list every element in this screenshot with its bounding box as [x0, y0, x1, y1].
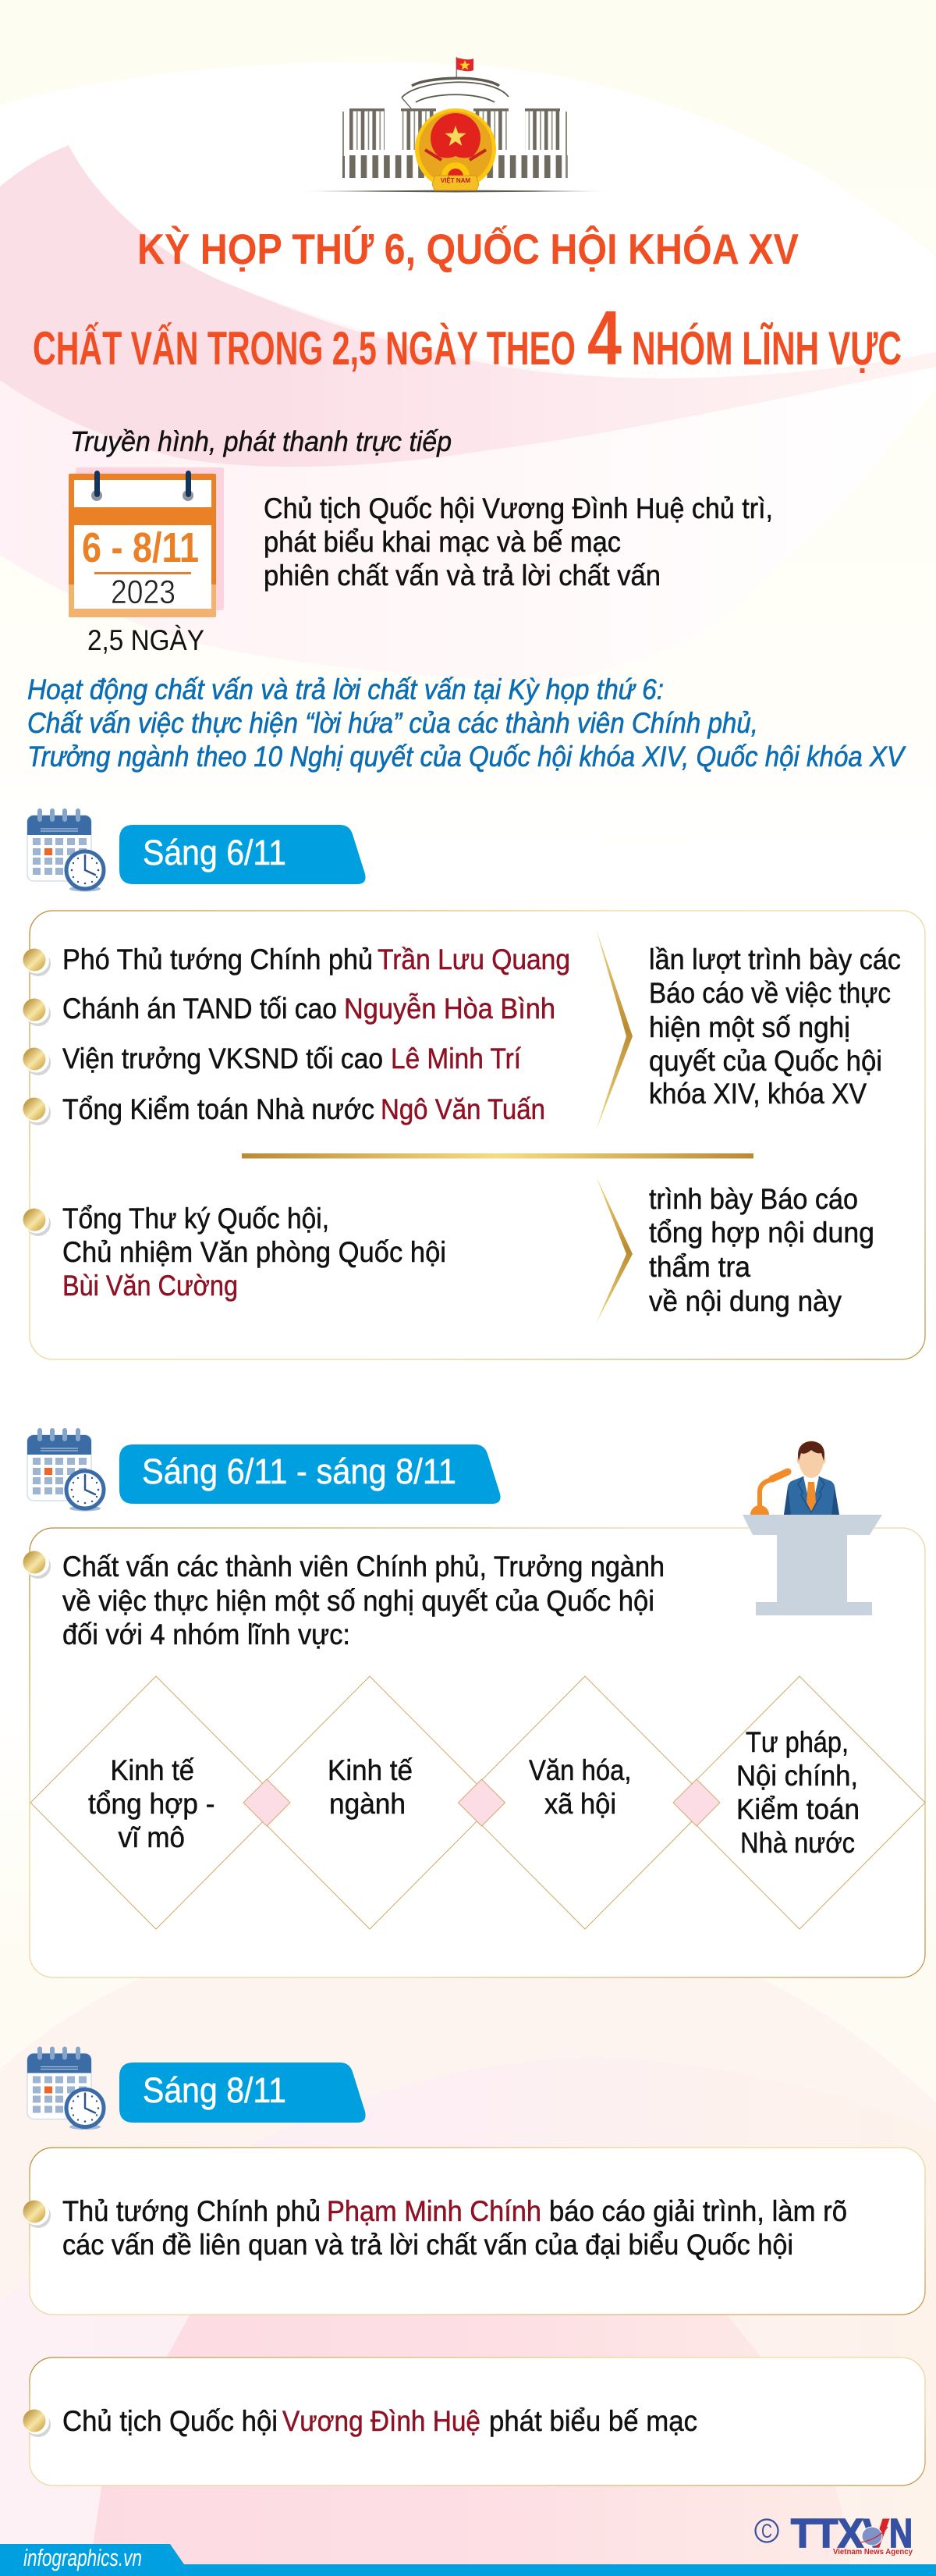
- presenter 1: [23, 943, 570, 976]
- date: 6 - 8/11: [82, 524, 199, 571]
- title: [33, 225, 902, 381]
- person: [784, 1441, 839, 1515]
- dome: [402, 78, 509, 108]
- ground line: [301, 190, 610, 192]
- presenter 5: [23, 1203, 446, 1302]
- bullet text: báo cáo giải trình, làm rõ: [549, 2195, 847, 2227]
- title line 2: [33, 295, 902, 381]
- text: report task: [649, 943, 901, 1110]
- emblem motto: VIỆT NAM: [441, 177, 470, 184]
- presenter 2: Nguyễn Hòa Bình: [344, 993, 555, 1025]
- panel: questioning: [23, 1528, 925, 1977]
- title line 1: KỲ HỌP THỨ 6, QUỐC HỘI KHÓA XV: [137, 225, 799, 273]
- bullet text: Chủ tịch Quốc hội: [62, 2405, 278, 2437]
- bullet text: Chất vấn các thành viên Chính phủ, Trưởng ngành: [62, 1551, 665, 1583]
- text block: chair: phiên chất vấn và trả lời chất vấn: [264, 560, 661, 592]
- diamond: justice: [674, 1676, 925, 1929]
- arrow: chevron 2: [596, 1176, 633, 1324]
- presenter 2: [23, 993, 555, 1026]
- diamond: macro economy: tổng hợp -: [88, 1788, 215, 1820]
- diamond: culture and society: xã hội: [544, 1788, 616, 1820]
- year: 2023: [111, 574, 176, 611]
- section header: Sáng 8/11: Sáng 8/11: [143, 2070, 286, 2110]
- arrow: chevron 1: [596, 929, 633, 1131]
- text: summary report: thẩm tra: [649, 1251, 750, 1283]
- diamond: justice: Nội chính,: [736, 1760, 858, 1792]
- section header: Sáng 6/11: [27, 811, 366, 891]
- section header: Sáng 6/11: Sáng 6/11: [143, 833, 286, 872]
- colonnade: [342, 108, 568, 178]
- logo: TTXVN: TTX: [791, 2511, 863, 2556]
- panel: closing speech: [23, 2357, 925, 2485]
- microphone: [750, 1472, 788, 1515]
- text block: activities: [27, 673, 906, 773]
- diamond: justice: Nhà nước: [740, 1827, 855, 1859]
- small pink diamonds: [243, 1779, 720, 1826]
- bullet text: Thủ tướng Chính phủ: [62, 2195, 321, 2227]
- diamond: sector economy: [244, 1676, 495, 1929]
- diamond: macro economy: [30, 1676, 282, 1929]
- text block: activities: Chất vấn việc thực hiện “lời hứa” của các thành viên Chính phủ,: [27, 707, 758, 739]
- bullet text: [23, 2195, 847, 2261]
- diamond: sector economy: Kinh tế: [328, 1754, 413, 1786]
- bullet text: các vấn đề liên quan và trả lời chất vấn của đại biểu Quốc hội: [62, 2229, 793, 2261]
- presenter 4: [23, 1093, 545, 1125]
- flag: [456, 57, 473, 79]
- text: summary report: tổng hợp nội dung: [649, 1217, 874, 1249]
- presenter 2: Chánh án TAND tối cao: [62, 993, 337, 1025]
- presenter 5: Tổng Thư ký Quốc hội,: [62, 1203, 329, 1235]
- diamond: culture and society: [459, 1676, 711, 1929]
- presenter 3: Viện trưởng VKSND tối cao: [62, 1043, 383, 1075]
- presenter 4: Tổng Kiểm toán Nhà nước: [62, 1093, 374, 1125]
- subheading: live broadcast: Truyền hình, phát thanh trực tiếp: [70, 425, 452, 457]
- title line 2: CHẤT VẤN TRONG 2,5 NGÀY THEO: [33, 322, 576, 375]
- section header: Sáng 8/11: [27, 2049, 366, 2130]
- bullet text: về việc thực hiện một số nghị quyết của Quốc hội: [62, 1585, 654, 1617]
- text: report task: khóa XIV, khóa XV: [649, 1078, 867, 1110]
- text block: chair: [264, 492, 773, 592]
- text: report task: quyết của Quốc hội: [649, 1045, 882, 1077]
- logo: TTXVN: N: [889, 2511, 913, 2556]
- text: report task: hiện một số nghị: [649, 1011, 850, 1043]
- footer site: infographics.vn: [23, 2544, 142, 2571]
- section header: Sáng 6/11 - sáng 8/11: [27, 1430, 501, 1511]
- footer bar: [0, 2544, 936, 2576]
- diamond: macro economy: vĩ mô: [119, 1821, 185, 1853]
- presenter 1: Phó Thủ tướng Chính phủ: [62, 943, 373, 975]
- diamond: macro economy: Kinh tế: [111, 1754, 194, 1786]
- logo: TTXVN: C: [761, 2521, 772, 2542]
- bullet text: đối với 4 nhóm lĩnh vực:: [62, 1618, 350, 1650]
- logo: TTXVN: V: [863, 2511, 889, 2556]
- presenter 3: [23, 1043, 522, 1075]
- bullet text: [23, 1550, 665, 1650]
- section header: Sáng 6/11 - sáng 8/11: Sáng 6/11 - sáng 8/11: [142, 1451, 456, 1491]
- presenter 4: Ngô Văn Tuấn: [381, 1093, 545, 1125]
- text: report task: Báo cáo về việc thực: [649, 977, 891, 1009]
- text: report task: lần lượt trình bày các: [649, 943, 901, 975]
- bullet text: Vương Đình Huệ: [282, 2405, 480, 2437]
- panel: morning 6/11 presenters: [23, 911, 925, 1359]
- bullet text: [23, 2405, 697, 2437]
- presenter 5: Bùi Văn Cường: [62, 1270, 238, 1302]
- lectern: [743, 1515, 882, 1615]
- panel: prime minister: [23, 2148, 925, 2315]
- icon: speaker at podium: [743, 1441, 882, 1615]
- presenter 1: Trần Lưu Quang: [378, 943, 570, 975]
- title line 2: 4: [587, 295, 622, 381]
- bullet text: phát biểu bế mạc: [489, 2405, 697, 2437]
- text: summary report: về nội dung này: [649, 1285, 842, 1317]
- text block: chair: Chủ tịch Quốc hội Vương Đình Huệ chủ trì,: [264, 492, 773, 524]
- diamond: justice: Kiểm toán: [736, 1793, 860, 1825]
- logo: TTXVN: [755, 2511, 913, 2556]
- national emblem: [415, 108, 496, 190]
- duration label: 2,5 NGÀY: [87, 624, 204, 656]
- presenter 3: Lê Minh Trí: [391, 1043, 522, 1075]
- logo: TTXVN: Vietnam News Agency: [833, 2547, 913, 2556]
- text: summary report: [649, 1183, 874, 1317]
- text: summary report: trình bày Báo cáo: [649, 1183, 858, 1215]
- bullet text: Phạm Minh Chính: [327, 2195, 541, 2227]
- text block: chair: phát biểu khai mạc và bế mạc: [264, 526, 621, 558]
- text block: activities: Hoạt động chất vấn và trả lời chất vấn tại Kỳ họp thứ 6:: [27, 673, 664, 705]
- diamond: justice: Tư pháp,: [746, 1726, 849, 1758]
- diamond: culture and society: Văn hóa,: [529, 1754, 632, 1786]
- diamond: sector economy: ngành: [329, 1788, 406, 1820]
- parliament emblem: [301, 57, 610, 192]
- presenter 5: Chủ nhiệm Văn phòng Quốc hội: [62, 1236, 446, 1268]
- icon: date calendar: [69, 467, 224, 617]
